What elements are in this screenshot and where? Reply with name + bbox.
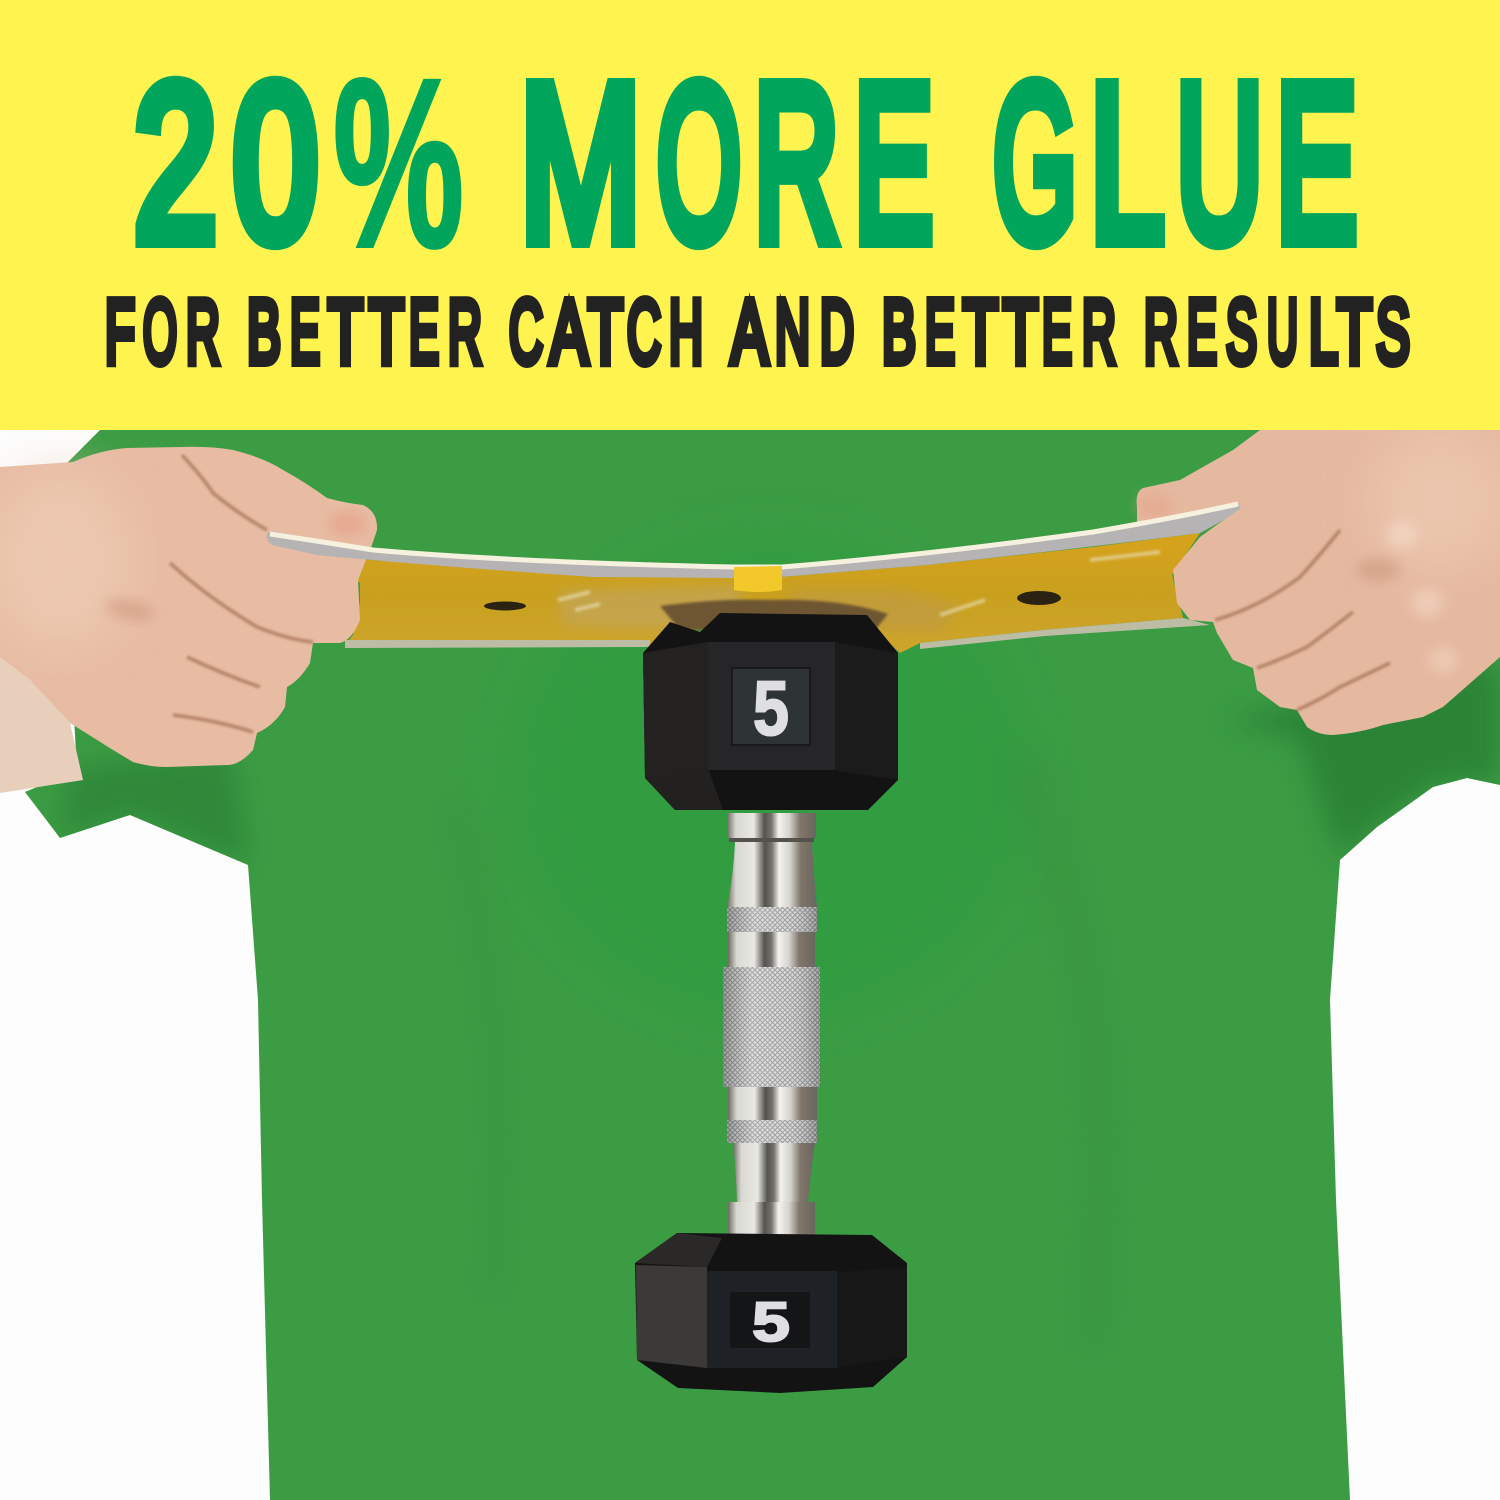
title: E	[854, 39, 933, 286]
title: %	[333, 29, 464, 297]
subtitle: C	[627, 282, 661, 382]
panel: green t-shirt	[25, 430, 1500, 1500]
subtitle: T	[963, 282, 998, 382]
subtitle: B	[247, 282, 281, 382]
subtitle: L	[1309, 282, 1338, 382]
panel: photo background	[0, 430, 1500, 1500]
dumbbell top head	[643, 613, 898, 810]
panel: board edge strip	[267, 502, 1241, 592]
subtitle: R	[186, 282, 220, 382]
subtitle: R	[448, 282, 482, 382]
title: M	[520, 39, 641, 286]
subtitle: S	[1376, 282, 1410, 382]
icon: left hand and forearm	[0, 447, 377, 793]
title: E	[1276, 39, 1357, 286]
subtitle: H	[669, 282, 703, 382]
subtitle: E	[1042, 282, 1072, 382]
subtitle: E	[1187, 282, 1217, 382]
dumbbell handle	[723, 813, 820, 1238]
dumbbell top head: 5	[753, 666, 789, 752]
subtitle: T	[1337, 282, 1372, 382]
dumbbell bottom head: 5	[752, 1290, 790, 1353]
icon: dumbbell	[635, 613, 907, 1393]
subtitle: T	[328, 282, 363, 382]
subtitle: U	[1267, 282, 1298, 382]
title: R	[754, 39, 839, 286]
title: O	[657, 39, 741, 286]
subtitle: E	[925, 282, 955, 382]
subtitle: T	[588, 282, 623, 382]
panel: yellow header banner	[0, 0, 1500, 430]
title: 0	[233, 39, 318, 286]
subtitle: A	[731, 282, 768, 382]
subtitle: R	[1144, 282, 1178, 382]
subtitle: C	[509, 282, 543, 382]
icon: right hand	[1137, 430, 1500, 735]
subtitle: T	[1003, 282, 1038, 382]
subtitle: T	[369, 282, 404, 382]
subtitle: S	[1226, 282, 1257, 382]
subtitle: O	[143, 282, 177, 382]
dumbbell bottom head	[635, 1233, 907, 1393]
subtitle: D	[820, 282, 854, 382]
title: G	[993, 39, 1077, 286]
subtitle: N	[775, 282, 810, 382]
title: 2	[134, 39, 217, 286]
subtitle: A	[550, 282, 588, 382]
panel: glue layer on board	[317, 533, 1210, 653]
subtitle: R	[1082, 282, 1116, 382]
subtitle: B	[882, 282, 916, 382]
title: L	[1090, 39, 1164, 286]
subtitle: E	[409, 282, 439, 382]
title: U	[1176, 39, 1263, 286]
subtitle: E	[290, 282, 320, 382]
subtitle: F	[105, 282, 135, 382]
